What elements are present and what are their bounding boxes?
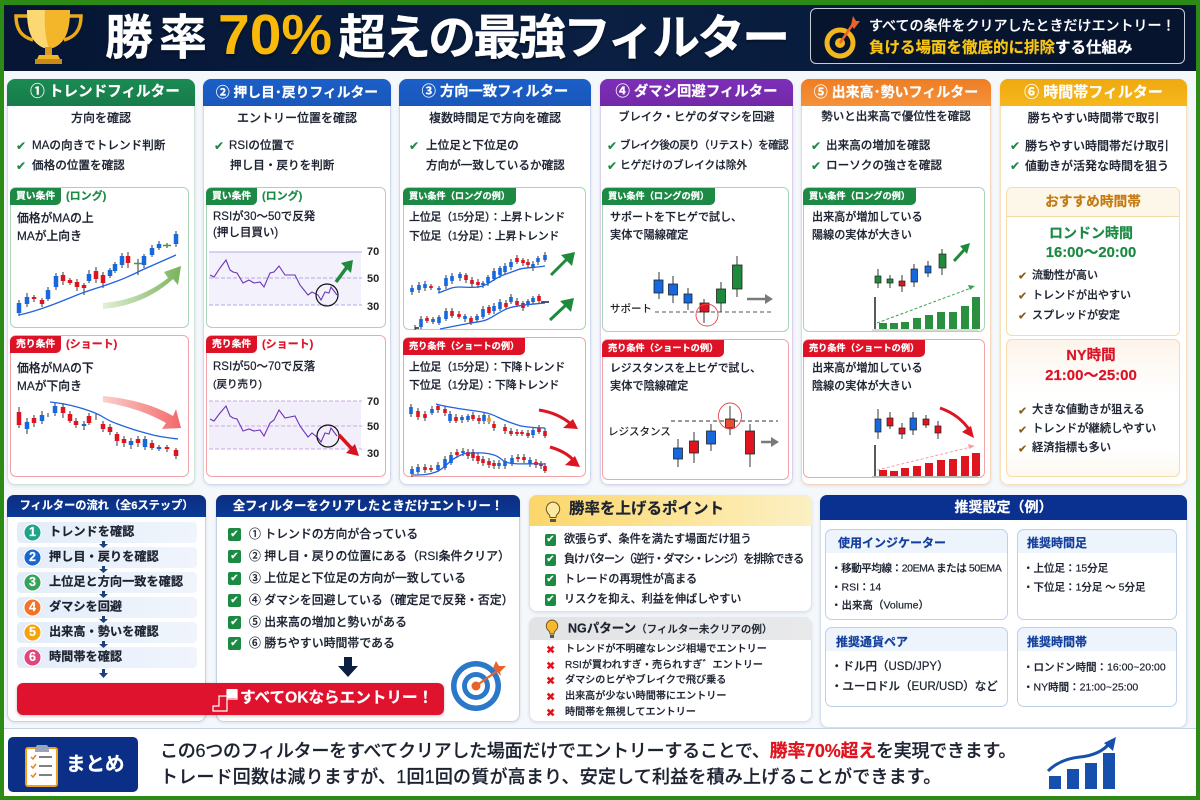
- sell condition card: [803, 339, 985, 478]
- card: currency pairs: [825, 627, 1008, 707]
- step 1: 1: [29, 525, 36, 539]
- checklist: ✔: [607, 139, 617, 153]
- checklist: [409, 139, 565, 172]
- arrow: down to entry: [338, 657, 358, 677]
- checklist items: ③ 上位足と下位足の方向が一致している: [249, 571, 466, 585]
- icon: clipboard: [25, 745, 58, 787]
- panel: volume and momentum filter: [801, 79, 991, 485]
- card: timeframes: ・下位足：1分足 〜 5分足: [1023, 582, 1146, 594]
- London bullets: ✔: [1018, 290, 1027, 302]
- buy condition card: 買い条件（ロングの例）: [608, 191, 709, 201]
- checklist: MAの向きでトレンド判断: [32, 139, 165, 152]
- buy condition card: [10, 187, 189, 328]
- icon: trophy: [14, 10, 83, 64]
- sell condition card: (戻り売り): [213, 379, 262, 391]
- buy condition card: 買い条件: [212, 191, 251, 202]
- checklist heading: 全フィルターをクリアしたときだけエントリー！: [233, 499, 503, 513]
- sell condition card: [403, 337, 586, 477]
- chart: RSI pullback sell: 50: [367, 421, 379, 433]
- step arrows: [99, 541, 108, 678]
- step 2: 押し目・戻りを確認: [49, 550, 159, 564]
- buy condition card: (ロング): [262, 190, 302, 202]
- checklist: ヒゲだけのブレイクは除外: [620, 160, 747, 172]
- step 4: ダマシを回避: [49, 600, 122, 614]
- card title: [1007, 188, 1179, 217]
- chart: RSI rebound: 50: [367, 273, 379, 285]
- subheading: 勝ちやすい時間帯で取引: [1027, 111, 1160, 125]
- checklist items: [228, 527, 514, 650]
- NG list: ✖: [546, 706, 555, 720]
- panel heading: ② 押し目･戻りフィルター: [216, 85, 378, 100]
- panel heading: [399, 79, 591, 106]
- NY session: [1045, 347, 1137, 384]
- buy condition card: 買い条件（ロングの例）: [809, 191, 910, 201]
- NG list: [546, 643, 767, 720]
- panel heading: [7, 79, 195, 106]
- chart: RSI rebound: 30: [367, 301, 379, 313]
- sell condition card: RSIが50〜70で反落: [213, 361, 315, 373]
- flow heading: [7, 495, 206, 517]
- step 1: トレンドを確認: [49, 525, 134, 539]
- panel heading: ⑤ 出来高･勢いフィルター: [814, 84, 978, 100]
- callout: enter only when all conditions clear: [810, 8, 1185, 64]
- NY bullets: 経済指標も多い: [1032, 442, 1111, 454]
- sell condition card: [206, 335, 386, 477]
- buy condition card: RSIが30〜50で反発: [213, 211, 315, 223]
- card: sessions: ・ロンドン時間：16:00~20:00: [1023, 662, 1166, 674]
- London session: [1046, 225, 1136, 261]
- chart: candles with rising volume bars: [872, 243, 980, 330]
- sell condition card: 下位足（1分足）：下降トレンド: [409, 379, 559, 391]
- points list: リスクを抑え、利益を伸ばしやすい: [564, 593, 741, 605]
- card: timeframes: ・上位足：15分足: [1023, 563, 1108, 575]
- settings heading: 推奨設定（例）: [954, 499, 1052, 515]
- checklist items: ④ ダマシを回避している（確定足で反発・否定）: [249, 593, 514, 607]
- panel: NG patterns: [529, 617, 812, 722]
- chart: RSI pullback sell: [209, 396, 379, 460]
- chart: resistance test candles: レジスタンス: [608, 426, 671, 438]
- card: currency pairs: ・ドル円（USD/JPY）: [831, 661, 949, 673]
- checklist items: ⑥ 勝ちやすい時間帯である: [249, 636, 395, 650]
- buy condition card: (ロング): [66, 190, 106, 202]
- buy condition card: 買い条件: [16, 191, 55, 202]
- header banner: [4, 5, 1196, 71]
- points list: ✔: [546, 534, 555, 545]
- subheading: ブレイク・ヒゲのダマシを回避: [618, 111, 775, 123]
- card: currency pairs: 推奨通貨ペア: [836, 635, 908, 649]
- sell condition card: 実体で陰線確定: [610, 380, 688, 392]
- icon: growth chart: [1047, 737, 1116, 789]
- points list: ✔: [546, 574, 555, 585]
- panel heading: ④ ダマシ回避フィルター: [615, 84, 778, 100]
- checklist: ✔: [214, 139, 224, 153]
- checklist: [811, 139, 942, 173]
- buy condition card: [602, 187, 789, 332]
- sell condition card: [10, 335, 189, 477]
- buy condition card: MAが上向き: [17, 229, 82, 243]
- chart: RSI rebound: 70: [367, 246, 379, 258]
- checklist: 上位足と下位足の: [426, 139, 519, 152]
- points list: トレードの再現性が高まる: [564, 573, 697, 585]
- buy condition card: [403, 187, 586, 330]
- step 3: 3: [29, 575, 36, 589]
- badge text: まとめ: [66, 753, 125, 775]
- checklist items: ✔: [230, 551, 239, 562]
- subheading: 方向を確認: [71, 111, 131, 125]
- NG list: ✖: [546, 690, 555, 704]
- icon: dart target: [824, 16, 860, 58]
- card title: おすすめ時間帯: [1045, 194, 1141, 209]
- checklist: 方向が一致しているか確認: [426, 159, 565, 172]
- NG title: NGパターン（フィルター未クリアの例）: [568, 622, 772, 636]
- NG list: ✖: [546, 644, 555, 656]
- checklist items: ✔: [230, 638, 239, 649]
- checklist: 価格の位置を確認: [32, 159, 125, 172]
- London bullets: [1018, 269, 1131, 322]
- card: indicators: ・RSI：14: [831, 582, 881, 594]
- banner text: すべてOKならエントリー！: [240, 690, 433, 707]
- sell condition card: MAが下向き: [17, 379, 82, 393]
- NG list: 時間帯を無視してエントリー: [565, 707, 696, 718]
- summary text: トレード回数は減りますが、1回1回の質が高まり、安定して利益を積み上げることができます。: [160, 767, 941, 787]
- panel heading: ① トレンドフィルター: [30, 84, 180, 100]
- subheading: エントリー位置を確認: [237, 111, 357, 125]
- NY bullets: ✔: [1018, 404, 1027, 418]
- checklist items: ⑤ 出来高の増加と勢いがある: [249, 615, 407, 629]
- buy condition card: 買い条件（ロングの例）: [409, 191, 510, 201]
- chart: candles with bearish volume bars: [872, 406, 980, 477]
- NY bullets: トレンドが継続しやすい: [1032, 423, 1156, 435]
- NG list: ✖: [546, 660, 555, 672]
- buy condition card: [206, 187, 386, 328]
- step 3: 上位足と方向一致を確認: [49, 575, 183, 589]
- sell condition card: 陰線の実体が大きい: [812, 380, 912, 392]
- points list: 負けパターン（逆行・ダマシ・レンジ）を排除できる: [564, 553, 803, 565]
- checklist: ✔: [16, 159, 26, 173]
- checklist: 値動きが活発な時間を狙う: [1025, 159, 1169, 173]
- NY bullets: ✔: [1018, 442, 1027, 456]
- NG list: RSIが買われすぎ・売られすぎ゛エントリー: [565, 660, 763, 671]
- NY session: NY時間: [1066, 348, 1116, 364]
- step 6: 時間帯を確認: [49, 650, 122, 664]
- checklist: ✔: [1010, 159, 1020, 173]
- chart: two downtrend timeframes: [409, 403, 580, 477]
- checklist: ✔: [16, 139, 26, 153]
- icon: flag: [212, 689, 238, 712]
- panel: fake-out avoidance filter: [600, 79, 793, 485]
- checklist items: ① トレンドの方向が合っている: [249, 527, 418, 541]
- panel heading: [1000, 79, 1187, 106]
- checklist: ✔: [607, 159, 617, 173]
- panel heading: ③ 方向一致フィルター: [422, 84, 568, 100]
- panel: win rate points: [529, 495, 812, 612]
- chart: uptrend candles with MA: [16, 231, 181, 316]
- checklist: 出来高の増加を確認: [826, 139, 930, 152]
- step 5: 5: [29, 625, 36, 639]
- card: indicators: ・移動平均線：20EMA または 50EMA: [831, 563, 1001, 575]
- panel: pullback filter: [203, 79, 391, 485]
- London bullets: ✔: [1018, 270, 1027, 282]
- London bullets: トレンドが出やすい: [1032, 289, 1131, 301]
- card: timeframes: [1017, 529, 1177, 620]
- step 4: [17, 597, 197, 618]
- checklist items: ② 押し目・戻りの位置にある（RSI条件クリア）: [249, 549, 510, 563]
- points list: ✔: [546, 594, 555, 605]
- points list: [545, 532, 803, 606]
- summary text: [160, 741, 1016, 787]
- card: sessions: [1017, 627, 1177, 707]
- step 4: 4: [29, 600, 36, 614]
- NG list: ✖: [546, 674, 555, 688]
- panel: time-of-day filter: [1000, 79, 1187, 485]
- checklist: ✔: [811, 159, 821, 173]
- NG heading: [529, 617, 812, 640]
- sell condition card: レジスタンスを上ヒゲで試し、: [610, 363, 761, 375]
- buy condition card: 上位足（15分足）：上昇トレンド: [409, 211, 565, 223]
- checklist items: ✔: [230, 573, 239, 584]
- sell condition card: 出来高が増加している: [812, 362, 923, 374]
- card: timeframes: 推奨時間足: [1027, 536, 1087, 550]
- NY bullets: 大きな値動きが狙える: [1032, 404, 1145, 416]
- panel heading: [600, 79, 793, 106]
- checklist: ✔: [811, 139, 821, 153]
- sell condition card: 売り条件（ショートの例）: [608, 343, 718, 353]
- panel: filter flow: [7, 495, 206, 722]
- chart: support test candles: [610, 256, 773, 326]
- step 6: 6: [29, 650, 36, 664]
- sell condition card: (ショート): [262, 338, 313, 350]
- points list: ✔: [546, 554, 555, 565]
- chart: RSI pullback sell: 30: [367, 448, 379, 460]
- buy condition card: 価格がMAの上: [17, 211, 94, 225]
- NY session: 21:00〜25:00: [1045, 367, 1137, 384]
- card: indicators: 使用インジケーター: [838, 536, 946, 550]
- London session: ロンドン時間: [1049, 225, 1133, 241]
- summary badge: [8, 737, 138, 792]
- NG list: 出来高が少ない時間帯にエントリー: [565, 691, 726, 702]
- step 2: 2: [29, 550, 36, 564]
- chart: RSI rebound: [209, 246, 379, 313]
- card: sessions: ・NY時間：21:00~25:00: [1023, 682, 1138, 694]
- step 2: [17, 547, 197, 568]
- panel: trend filter: [7, 79, 195, 485]
- checklist: RSIの位置で: [229, 139, 295, 152]
- points list: 欲張らず、条件を満たす場面だけ狙う: [564, 533, 752, 545]
- icon: light bulb: [546, 502, 560, 522]
- entry banner: [17, 683, 444, 715]
- NY bullets: [1018, 403, 1156, 456]
- sell condition card: [602, 339, 789, 480]
- points heading: [529, 495, 812, 526]
- checklist: ✔: [1010, 139, 1020, 153]
- London bullets: 流動性が高い: [1032, 269, 1098, 281]
- recommended times card: [1006, 187, 1180, 336]
- chart: downtrend candles with MA: [16, 396, 181, 459]
- panel: direction filter: [399, 79, 591, 485]
- buy condition card: [803, 187, 985, 332]
- buy condition card: 下位足（1分足）：上昇トレンド: [409, 230, 559, 242]
- callout text line 1: すべての条件をクリアしたときだけエントリー！: [869, 18, 1175, 34]
- summary text: この6つのフィルターをすべてクリアした場面だけでエントリーすることで、勝率70%超えを実現できます。: [160, 741, 1016, 761]
- sell condition card: (ショート): [66, 338, 117, 350]
- sell condition card: 売り条件（ショートの例）: [809, 343, 919, 353]
- subheading: 勢いと出来高で優位性を確認: [821, 111, 971, 123]
- settings heading: [820, 495, 1187, 520]
- panel: recommended settings: [820, 495, 1187, 728]
- London bullets: スプレッドが安定: [1032, 309, 1120, 321]
- card: indicators: ・出来高（Volume）: [831, 600, 929, 612]
- NG list: ダマシのヒゲやブレイクで飛び乗る: [565, 675, 726, 686]
- icon: warning bulb: [546, 620, 558, 638]
- buy condition card: 陽線の実体が大きい: [812, 229, 912, 241]
- checklist: [214, 139, 334, 172]
- checklist: ローソクの強さを確認: [826, 159, 942, 172]
- card: currency pairs: ・ユーロドル（EUR/USD）など: [831, 681, 998, 693]
- summary bar: [4, 728, 1196, 796]
- step 5: 出来高・勢いを確認: [49, 625, 159, 639]
- sell condition card: 売り条件: [212, 339, 251, 350]
- step 5: [17, 622, 197, 643]
- sell condition card: 売り条件（ショートの例）: [409, 341, 519, 351]
- chart: RSI pullback sell: 70: [367, 396, 379, 408]
- icon: target with arrow: [451, 661, 506, 711]
- NG list: トレンドが不明確なレンジ相場でエントリー: [565, 644, 767, 655]
- London bullets: ✔: [1018, 310, 1027, 322]
- buy condition card: 出来高が増加している: [812, 211, 923, 223]
- panel heading: [203, 79, 391, 106]
- checklist: [1010, 139, 1169, 173]
- NY bullets: ✔: [1018, 424, 1027, 436]
- checklist items: ✔: [230, 529, 239, 540]
- sell condition card: 売り条件: [16, 339, 55, 350]
- chart: resistance test candles: [608, 402, 779, 467]
- buy condition card: (押し目買い): [213, 227, 278, 239]
- callout text line 2: 負ける場面を徹底的に排除する仕組み: [869, 40, 1133, 57]
- points title: 勝率を上げるポイント: [569, 501, 724, 518]
- step 6: [17, 647, 197, 668]
- chart: support test candles: サポート: [610, 303, 652, 315]
- step 3: [17, 572, 197, 593]
- panel heading: [801, 79, 991, 106]
- title: 勝率70%超えの最強フィルター: [105, 3, 787, 67]
- subheading: 複数時間足で方向を確認: [429, 111, 561, 125]
- card: sessions: 推奨時間帯: [1027, 635, 1087, 649]
- New York card: [1006, 339, 1180, 477]
- checklist: ✔: [409, 139, 419, 153]
- panel heading: ⑥ 時間帯フィルター: [1024, 84, 1163, 101]
- sell condition card: 価格がMAの下: [17, 361, 94, 375]
- checklist heading: [216, 495, 520, 517]
- flow heading: フィルターの流れ（全6ステップ）: [20, 500, 193, 512]
- buy condition card: 実体で陽線確定: [610, 229, 688, 241]
- panel: entry checklist: [216, 495, 520, 722]
- card: indicators: [825, 529, 1008, 620]
- sell condition card: 上位足（15分足）：下降トレンド: [409, 361, 565, 373]
- checklist: [16, 139, 166, 173]
- checklist: 押し目・戻りを判断: [230, 159, 334, 172]
- buy condition card: サポートを下ヒゲで試し、: [610, 211, 742, 223]
- checklist items: ✔: [230, 595, 239, 606]
- chart: two uptrend timeframes: [410, 252, 575, 330]
- checklist: [607, 138, 789, 173]
- London session: 16:00〜20:00: [1046, 245, 1136, 261]
- checklist: ブレイク後の戻り（リテスト）を確認: [620, 140, 788, 152]
- checklist: 勝ちやすい時間帯だけ取引: [1025, 139, 1169, 153]
- checklist items: ✔: [230, 617, 239, 628]
- step 1: [17, 522, 197, 543]
